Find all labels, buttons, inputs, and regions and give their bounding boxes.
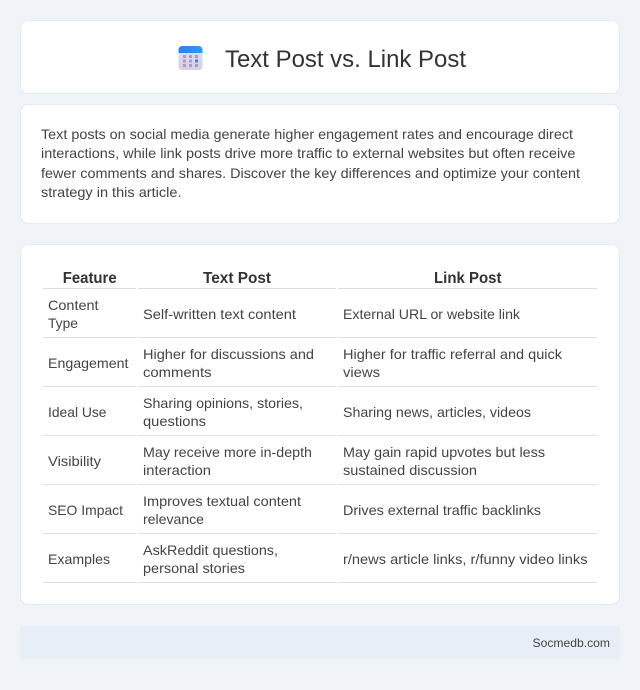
row: visibility (43, 444, 597, 484)
table header row: Feature (63, 270, 117, 287)
row: engagement: views (343, 364, 380, 380)
row: seo impact: relevance (143, 511, 204, 527)
row: content type (43, 297, 597, 338)
row: content type: Self-written text content (143, 306, 296, 322)
table header row: Text Post (203, 270, 272, 287)
row: ideal use (43, 395, 597, 436)
footer bar (20, 626, 620, 660)
row: ideal use: Sharing opinions, stories, (143, 395, 303, 411)
row: seo impact: SEO Impact (48, 502, 123, 518)
intro text: interactions, while link posts drive more traffic to external websites but often receive (41, 145, 576, 161)
row: examples (43, 542, 597, 582)
row: visibility: May gain rapid upvotes but less (343, 444, 545, 460)
intro text: fewer comments and shares. Discover the key differences and optimize your content (41, 165, 580, 181)
title: Text Post vs. Link Post (225, 46, 466, 73)
row: examples: r/news article links, r/funny video links (343, 551, 588, 567)
intro text: strategy in this article. (41, 184, 182, 200)
row: examples: personal stories (143, 560, 245, 576)
panel: comparison table (20, 244, 620, 604)
row: visibility: May receive more in-depth (143, 444, 312, 460)
row: content type: Type (48, 315, 78, 331)
row: ideal use: Sharing news, articles, videos (343, 404, 531, 420)
panel: header (20, 20, 620, 94)
row: seo impact (43, 493, 597, 534)
row: content type: External URL or website link (343, 306, 521, 322)
row: seo impact: Drives external traffic backlinks (343, 502, 541, 518)
row: seo impact: Improves textual content (143, 493, 301, 509)
panel: introduction (20, 104, 620, 224)
row: content type: Content (48, 297, 99, 313)
icon: calendar (178, 46, 202, 70)
table header row (43, 270, 597, 288)
row: visibility: interaction (143, 462, 211, 478)
row: visibility: sustained discussion (343, 462, 477, 478)
intro text: Text posts on social media generate higher engagement rates and encourage direct (41, 126, 573, 142)
row: ideal use: Ideal Use (48, 404, 107, 420)
row: ideal use: questions (143, 413, 206, 429)
row: examples: AskReddit questions, (143, 542, 278, 558)
intro text (41, 126, 580, 200)
table header row: Link Post (434, 270, 502, 287)
row: engagement: Higher for discussions and (143, 346, 314, 362)
row: engagement (43, 346, 597, 386)
row: engagement: Higher for traffic referral and quick (343, 346, 563, 362)
row: engagement: comments (143, 364, 212, 380)
row: visibility: Visibility (48, 453, 101, 469)
row: examples: Examples (48, 551, 110, 567)
footer credit: Socmedb.com (532, 636, 610, 650)
row: engagement: Engagement (48, 355, 129, 371)
